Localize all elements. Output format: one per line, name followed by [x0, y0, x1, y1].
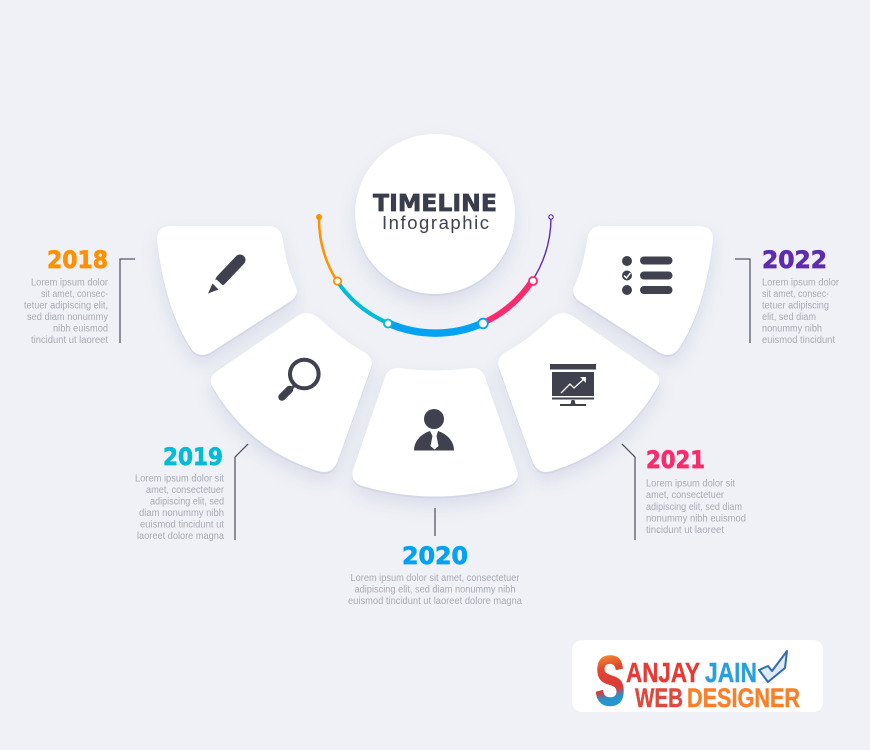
panel: 2019 card: [211, 313, 372, 472]
text block: 2019: [135, 443, 225, 542]
text block: 2018: tetuer adipiscing elit,: [24, 300, 108, 312]
text block: 2021: [646, 446, 746, 536]
text block: 2020: 2020: [402, 542, 468, 570]
subtitle: Infographic: [382, 212, 489, 233]
text block: 2022: 2022: [762, 246, 827, 274]
text block: 2018: sit amet, consec-: [41, 289, 108, 300]
icon: magnifier: [282, 360, 319, 397]
text block: 2020: euismod tincidunt ut laoreet dolore magna: [348, 596, 523, 607]
logo panel: JAIN: [705, 657, 757, 688]
text block: 2021: 2021: [646, 446, 705, 474]
text block: 2022: elit, sed diam: [762, 312, 816, 323]
panel: 2021 card: [498, 313, 659, 472]
text block: 2022: tetuer adipiscing: [762, 300, 829, 312]
text block: 2019: laoreet dolore magna: [137, 531, 225, 542]
text block: 2019: diam nonummy nibh: [139, 508, 224, 519]
logo panel: WEB: [635, 683, 683, 713]
text block: 2022: sit amet, consec-: [762, 289, 829, 300]
panel: 2020 card: [352, 368, 518, 496]
text block: 2021: amet, consectetuer: [646, 490, 725, 501]
center circle: title: [355, 134, 515, 294]
title: TIMELINE: [373, 189, 497, 217]
text block: 2018: nibh euismod: [53, 324, 108, 334]
icon: presentation board: [550, 364, 596, 406]
text block: 2022: nonummy nibh: [762, 324, 822, 334]
icon: person: [414, 409, 454, 450]
text block: 2019: 2019: [163, 443, 223, 471]
text block: 2022: euismod tincidunt: [762, 335, 835, 346]
text block: 2022: Lorem ipsum dolor: [762, 278, 840, 288]
panel: 2022 card: [573, 226, 713, 355]
timeline arc: [316, 214, 553, 333]
logo panel: ANJAY: [626, 657, 700, 688]
connector: 2022: [735, 259, 750, 343]
icon: checklist: [622, 256, 672, 295]
text block: 2021: Lorem ipsum dolor sit: [646, 478, 735, 490]
text block: 2018: 2018: [47, 246, 108, 274]
text block: 2018: [24, 246, 109, 346]
connector: 2021: [622, 444, 635, 540]
text block: 2021: adipiscing elit, sed diam: [646, 502, 742, 513]
connector: 2019: [235, 444, 248, 540]
text block: 2019: euismod tincidunt ut: [140, 520, 224, 530]
text block: 2018: sed diam nonummy: [27, 312, 108, 323]
text block: 2018: tincidunt ut laoreet: [31, 335, 108, 346]
text block: 2018: Lorem ipsum dolor: [31, 278, 109, 288]
text block: 2020: adipiscing elit, sed diam nonummy nibh: [354, 584, 516, 596]
text block: 2022: [762, 246, 840, 346]
connector: 2020: [434, 508, 436, 536]
text block: 2021: nonummy nibh euismod: [646, 514, 746, 524]
text block: 2019: adipiscing elit, sed: [150, 496, 224, 508]
panel: 2018 card: [157, 226, 297, 355]
text block: 2020: [348, 542, 523, 607]
text block: 2020: Lorem ipsum dolor sit amet, consectetuer: [350, 573, 520, 584]
icon: pencil: [208, 260, 240, 294]
text block: 2021: tincidunt ut laoreet: [646, 525, 724, 536]
text block: 2019: Lorem ipsum dolor sit: [135, 474, 224, 484]
logo panel: [572, 640, 823, 720]
logo panel: S: [595, 642, 625, 720]
text block: 2019: amet, consectetuer: [146, 485, 225, 496]
logo panel: DESIGNER: [687, 683, 800, 713]
connector: 2018: [120, 259, 135, 343]
